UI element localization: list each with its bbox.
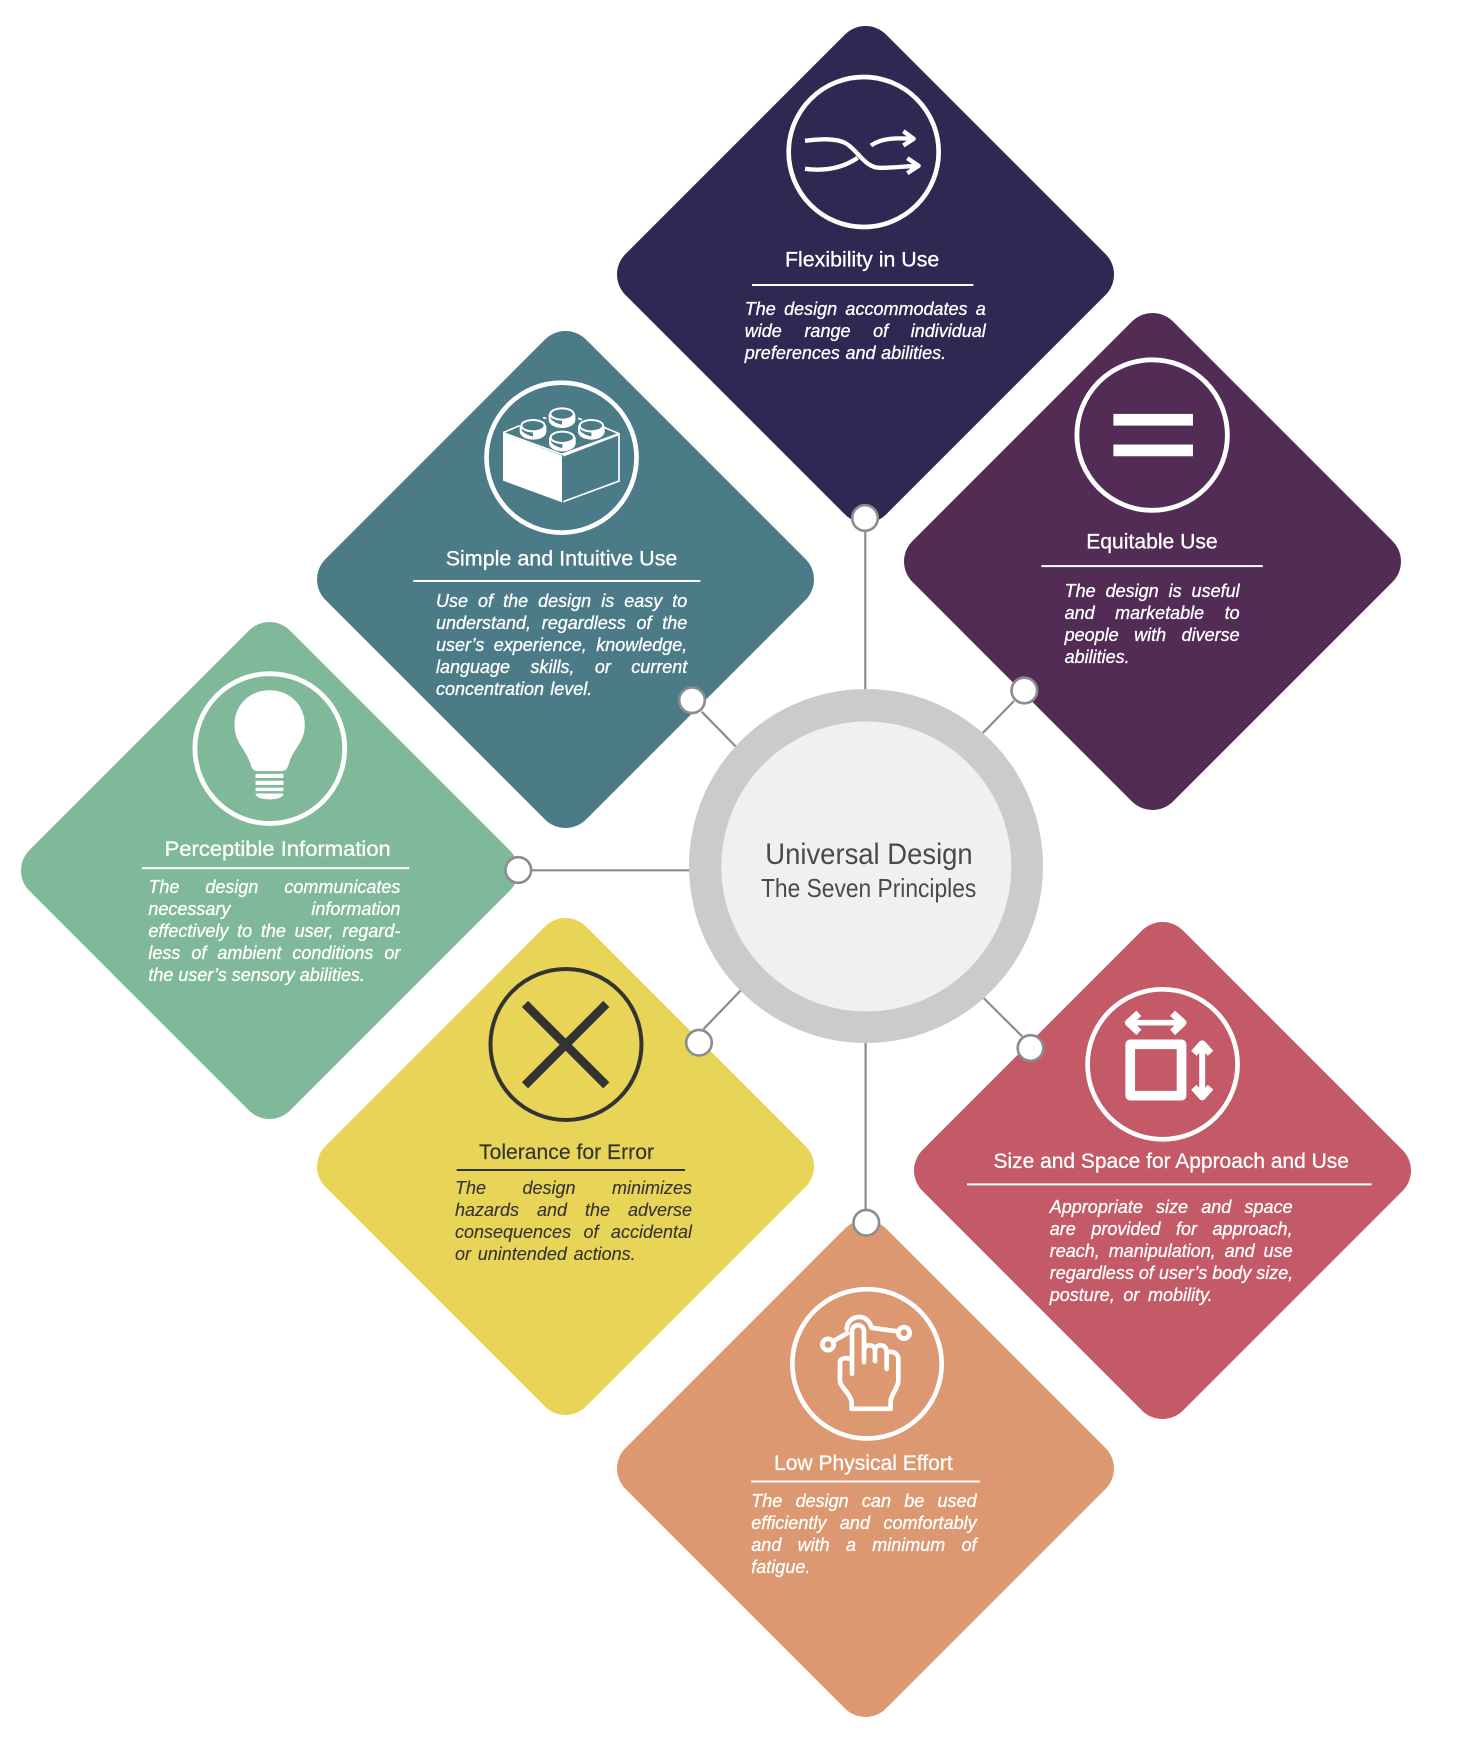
panel: Equitable Use bbox=[904, 313, 1401, 810]
text: Tolerance description: consequences of accidental bbox=[455, 1222, 692, 1242]
hub inner disc bbox=[721, 721, 1011, 1011]
connector: Tolerance bbox=[686, 986, 745, 1055]
text: Perceptible description: less of ambient conditions or bbox=[148, 943, 400, 963]
heading: Low Physical Effort: Low Physical Effort bbox=[774, 1450, 953, 1474]
icon: equals sign bbox=[1077, 360, 1227, 511]
text: Low Physical Effort description: fatigue. bbox=[751, 1557, 810, 1577]
connector: Size and Space bbox=[975, 990, 1043, 1061]
text: Size and Space description: reach, manipulation, and use bbox=[1050, 1241, 1293, 1261]
diamond: Tolerance bbox=[305, 906, 826, 1427]
heading: Equitable Use: Equitable Use bbox=[1086, 530, 1218, 554]
text: Tolerance description bbox=[455, 1178, 692, 1264]
connector: Simple bbox=[679, 688, 745, 756]
icon: building brick bbox=[487, 383, 637, 533]
heading: Size and Space for Approach and Use: Size and Space for Approach and Use bbox=[994, 1149, 1349, 1173]
hub outer ring bbox=[689, 688, 1043, 1042]
icon: hand tapping bbox=[792, 1289, 942, 1438]
text: Perceptible description: The design communicates bbox=[148, 877, 400, 897]
text: Perceptible description bbox=[148, 877, 402, 986]
text: Flexibility description: preferences and abilities. bbox=[745, 343, 946, 363]
text: Simple description: concentration level. bbox=[436, 679, 592, 699]
text: Equitable description: The design is useful bbox=[1065, 581, 1240, 601]
heading: Tolerance for Error: Tolerance for Error bbox=[479, 1140, 654, 1164]
text: Equitable description: people with diverse bbox=[1065, 625, 1240, 645]
heading: Flexibility in Use: Flexibility in Use bbox=[785, 247, 939, 271]
text: Flexibility description bbox=[744, 299, 986, 364]
text: Low Physical Effort description: The design can be used bbox=[751, 1491, 977, 1511]
panel: Tolerance for Error bbox=[317, 918, 814, 1415]
text: Simple description: Use of the design is easy to bbox=[436, 590, 687, 610]
diamond: Flexibility bbox=[605, 14, 1126, 534]
text: Simple description bbox=[436, 590, 688, 699]
diamond: Low Physical Effort bbox=[605, 1208, 1126, 1728]
text: Size and Space description: regardless of user’s body size, bbox=[1050, 1263, 1293, 1283]
connector: Flexibility bbox=[852, 505, 878, 700]
diamond: Size and Space bbox=[902, 910, 1423, 1431]
text: Simple description: understand, regardless of the bbox=[436, 613, 687, 633]
panel: Flexibility in Use bbox=[617, 26, 1114, 520]
connector: Perceptible bbox=[506, 857, 700, 883]
hub title: Universal Design bbox=[765, 837, 973, 870]
hub subtitle: The Seven Principles bbox=[761, 873, 976, 903]
center hub: Universal Design bbox=[689, 689, 1043, 1043]
diamond: Perceptible bbox=[9, 610, 530, 1131]
icon: square with size arrows bbox=[1088, 989, 1238, 1139]
text: Low Physical Effort description: efficiently and comfortably bbox=[751, 1513, 977, 1533]
text: Equitable description: abilities. bbox=[1065, 647, 1130, 667]
text: Tolerance description: hazards and the adverse bbox=[455, 1200, 692, 1220]
connector: Equitable bbox=[975, 678, 1037, 741]
text: Size and Space description: Appropriate size and space bbox=[1050, 1197, 1293, 1217]
text: Low Physical Effort description: and with a minimum of bbox=[751, 1535, 977, 1555]
connector: Low Physical Effort bbox=[854, 1030, 879, 1235]
text: Perceptible description: necessary information bbox=[148, 899, 400, 919]
panel: Perceptible Information bbox=[21, 622, 515, 1119]
text: Size and Space description: posture, or mobility. bbox=[1050, 1285, 1213, 1305]
icon: light bulb bbox=[195, 673, 345, 823]
panel: Size and Space for Approach and Use bbox=[914, 922, 1411, 1419]
text: Simple description: language skills, or current bbox=[436, 657, 687, 677]
text: Equitable description bbox=[1064, 581, 1240, 667]
text: Perceptible description: effectively to the user, regard- bbox=[148, 921, 400, 941]
text: Flexibility description: The design accommodates a bbox=[745, 299, 986, 319]
diamond: Simple bbox=[305, 319, 826, 840]
text: Size and Space description: are provided for approach, bbox=[1050, 1219, 1293, 1239]
panel: Simple and Intuitive Use bbox=[317, 331, 814, 828]
text: Size and Space description bbox=[1048, 1197, 1293, 1306]
icon: shuffle arrows bbox=[789, 77, 939, 226]
text: Low Physical Effort description bbox=[751, 1491, 978, 1578]
heading: Perceptible Information: Perceptible Information bbox=[165, 836, 391, 860]
text: Perceptible description: the user’s sensory abilities. bbox=[148, 965, 365, 985]
diamond: Equitable bbox=[892, 301, 1413, 822]
text: Tolerance description: or unintended actions. bbox=[455, 1244, 636, 1264]
text: Simple description: user’s experience, knowledge, bbox=[436, 635, 687, 655]
panel: Low Physical Effort bbox=[617, 1223, 1114, 1717]
text: Flexibility description: wide range of individual bbox=[745, 321, 986, 341]
text: Tolerance description: The design minimizes bbox=[455, 1178, 692, 1198]
text: Equitable description: and marketable to bbox=[1065, 603, 1240, 623]
heading: Simple and Intuitive Use: Simple and Intuitive Use bbox=[446, 547, 678, 571]
icon: cross mark bbox=[491, 969, 642, 1120]
